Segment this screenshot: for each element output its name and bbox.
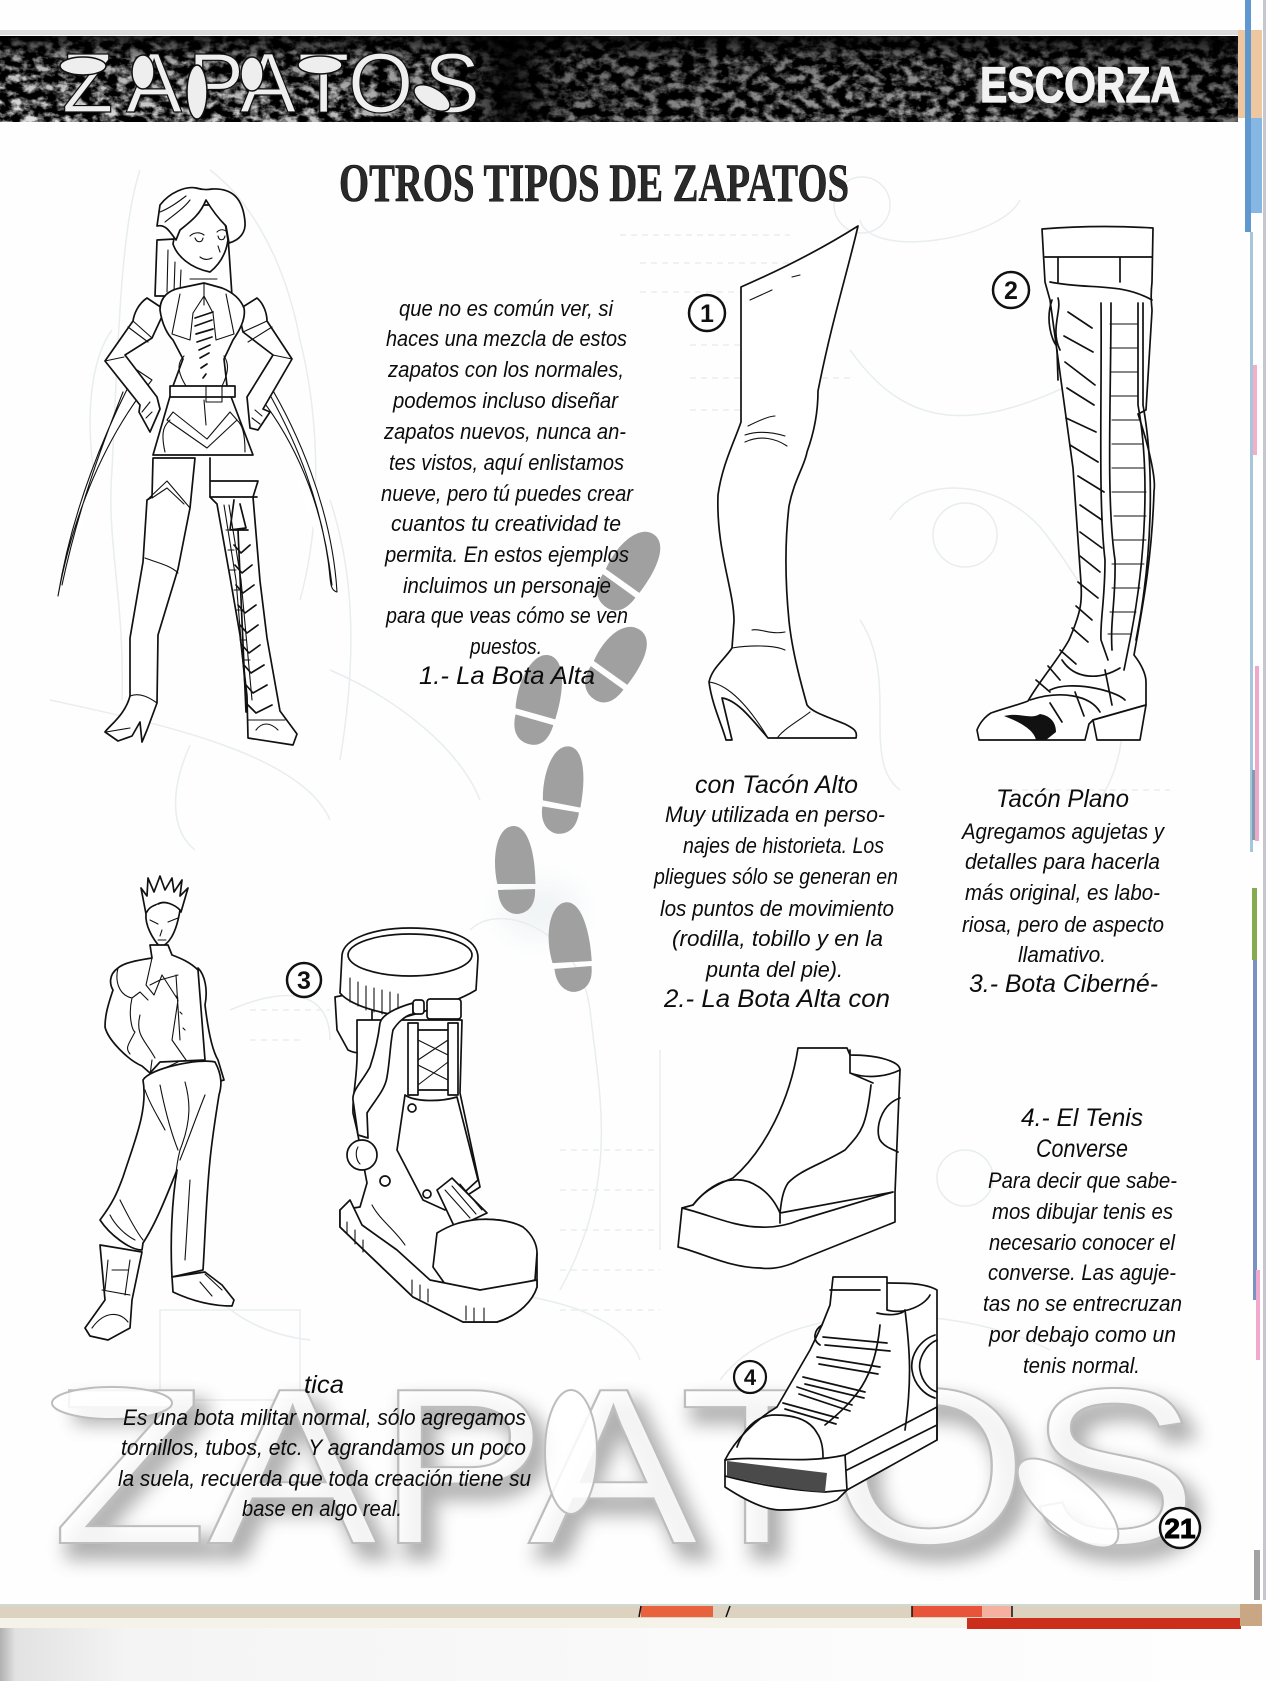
sole: [340, 1200, 537, 1322]
text block 4: por debajo como un: [988, 1322, 1176, 1347]
text block 5: la suela, recuerda que toda creación tiene su: [118, 1466, 531, 1491]
text block 3: riosa, pero de aspecto: [962, 912, 1164, 937]
text block 5: base en algo real.: [242, 1496, 402, 1521]
text block 5: tornillos, tubos, etc. Y agrandamos un poco: [121, 1435, 526, 1460]
text block 3: llamativo.: [1018, 942, 1106, 967]
text block 1: para que veas cómo se ven: [385, 603, 628, 628]
text block 2: punta del pie).: [705, 957, 843, 982]
text block 2: najes de historieta. Los: [683, 833, 884, 858]
text block 4: tenis normal.: [1023, 1353, 1140, 1378]
text block 5: tica: [304, 1371, 344, 1399]
text block 3: Agregamos agujetas y: [960, 819, 1166, 844]
text block 1: permita. En estos ejemplos: [384, 542, 629, 567]
text block 4: tas no se entrecruzan: [983, 1291, 1182, 1316]
big watermark word ZAPATOS: ZAPATOS: [52, 1343, 1198, 1591]
text block 3: [960, 785, 1166, 998]
show-through ghost drawings: [50, 170, 1170, 1400]
header band: [0, 30, 1238, 122]
text block 1: podemos incluso diseñar: [392, 388, 620, 413]
text block 4: 4.- El Tenis: [1021, 1104, 1143, 1132]
header logo: ZAPATOS: ZAPATOS: [62, 36, 480, 130]
text block 3: más original, es labo-: [965, 880, 1160, 905]
sneaker outline sketch: [678, 1048, 900, 1268]
text block 3: Tacón Plano: [996, 785, 1129, 813]
number badge 1: 1: [700, 300, 714, 328]
lacing panel: [408, 1023, 458, 1095]
text block 4: converse. Las aguje-: [988, 1260, 1176, 1285]
text block 1: zapatos nuevos, nunca an-: [383, 419, 626, 444]
leg shaft: [340, 1020, 537, 1322]
boot 1: high boot with high heel: [709, 226, 858, 740]
blades: [58, 370, 337, 596]
figure: man with cyber boot: [85, 876, 234, 1340]
man shoes: [85, 1245, 234, 1340]
text block 4: necesario conocer el: [989, 1230, 1176, 1255]
footprint 1: [589, 522, 670, 619]
number badge 2: [993, 272, 1029, 308]
footprint 5: [491, 824, 539, 916]
text block 5: Es una bota militar normal, sólo agregamos: [123, 1405, 526, 1430]
girl left arm: [105, 298, 165, 432]
text block 4: mos dibujar tenis es: [992, 1199, 1173, 1224]
number badge 1: [689, 295, 725, 331]
strap at back: [335, 995, 372, 1053]
text block 3: detalles para hacerla: [965, 849, 1160, 874]
toe cap: [433, 1219, 537, 1290]
text block 1: nueve, pero tú puedes crear: [381, 481, 635, 506]
man arm in pocket: [198, 968, 224, 1085]
high-top converse sneaker: [725, 1277, 937, 1510]
section tag: ESCORZA: ESCORZA: [980, 57, 1180, 113]
text block 2: Muy utilizada en perso-: [665, 802, 885, 827]
text block 2: (rodilla, tobillo y en la: [672, 926, 883, 951]
bottom page edge: [0, 1604, 1262, 1629]
figure: girl wearing boots: [58, 188, 337, 745]
text block 2: pliegues sólo se generan en: [653, 864, 898, 889]
number badge 4: [734, 1361, 766, 1393]
text block 1: que no es común ver, si: [399, 296, 614, 321]
girl torso: [153, 283, 253, 455]
text block 1: cuantos tu creatividad te: [391, 511, 621, 536]
girl right arm: [238, 298, 292, 430]
number badge 2: 2: [1004, 277, 1018, 305]
front lacing: [437, 1178, 487, 1228]
text block 4: [983, 1104, 1182, 1378]
man torso and arm: [105, 945, 205, 1073]
front plate and disc: [397, 1095, 478, 1210]
man face: [146, 903, 180, 947]
footprint 2: [577, 617, 656, 711]
number badge 3: 3: [297, 967, 311, 995]
text block 1: [381, 296, 635, 690]
long hair: [155, 236, 232, 296]
footprint 3: [509, 651, 567, 748]
text block 4: Converse: [1036, 1135, 1128, 1163]
text block 2: con Tacón Alto: [695, 771, 858, 799]
title: OTROS TIPOS DE ZAPATOS: [339, 153, 849, 213]
number badge 4: 4: [744, 1365, 757, 1390]
text block 1: 1.- La Bota Alta: [419, 662, 595, 690]
big watermark word ZAPATOS: ZAPATOS: [62, 1356, 1208, 1604]
text block 2: 2.- La Bota Alta con: [663, 985, 890, 1013]
boot 2: cyber lace-up boot with flat heel: [977, 227, 1154, 740]
girl left leg boot: [105, 458, 195, 742]
text block 1: puestos.: [469, 634, 542, 659]
text block 1: haces una mezcla de estos: [386, 326, 627, 351]
ring collar: [340, 928, 478, 1017]
number badge 3: [287, 963, 321, 997]
man hair: [141, 876, 188, 914]
footprint 6: [543, 900, 597, 995]
text block 3: 3.- Bota Ciberné-: [969, 970, 1158, 998]
boot 3: cybernetic military boot: [335, 928, 537, 1322]
text block 1: zapatos con los normales,: [387, 357, 624, 382]
pipes: [353, 1003, 413, 1138]
footprint 4: [539, 744, 587, 836]
page number badge: 21: [1164, 1513, 1196, 1544]
right page edge tabs: [1238, 0, 1266, 1600]
footprints trail: [491, 522, 670, 995]
text block 1: incluimos un personaje: [403, 573, 611, 598]
text block 5: [118, 1371, 531, 1521]
text block 4: Para decir que sabe-: [988, 1168, 1177, 1193]
floor below the page: [0, 1626, 1280, 1681]
text block 2: los puntos de movimiento: [660, 896, 894, 921]
text block 1: tes vistos, aquí enlistamos: [389, 450, 624, 475]
girl right leg lace-up boot: [210, 458, 297, 745]
page number badge: [1160, 1508, 1200, 1548]
neck and face: [173, 205, 228, 272]
text block 2: [653, 771, 898, 1013]
man trousers: [100, 1061, 221, 1277]
